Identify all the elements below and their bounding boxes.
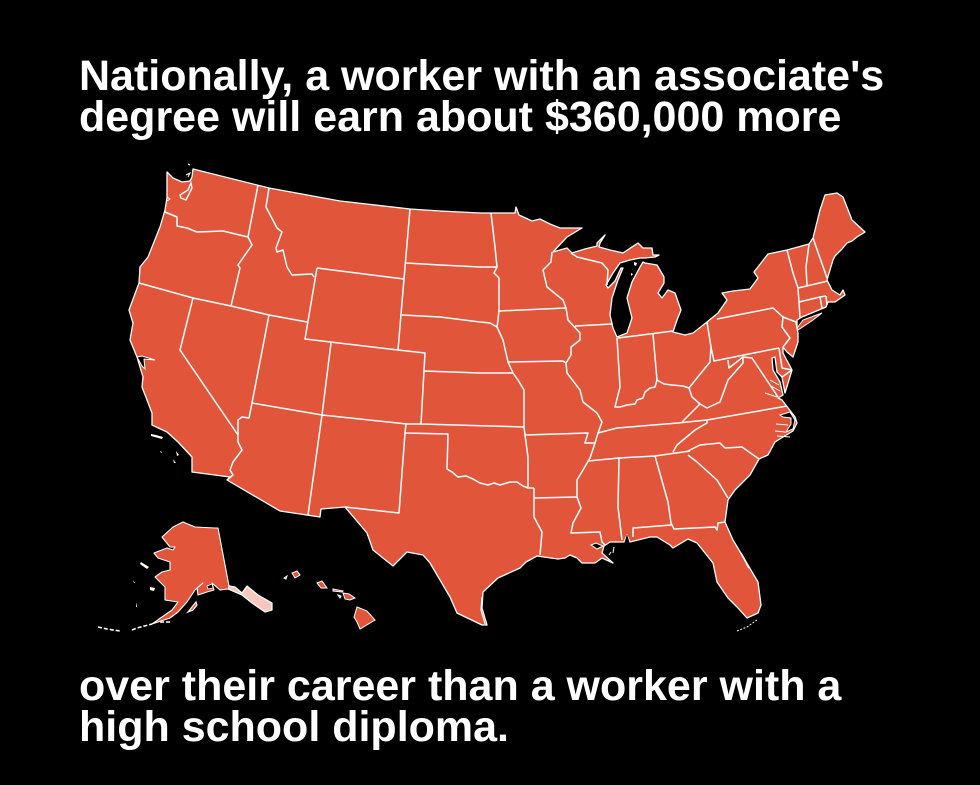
state borders	[139, 185, 828, 555]
North Carolina tidal rivers	[775, 424, 790, 437]
west borders	[139, 185, 534, 515]
Molokai and Lanai	[333, 589, 343, 598]
heading: top statement: Nationally, a worker with an associate's	[79, 52, 884, 100]
Channel Islands	[151, 434, 179, 463]
Maui	[343, 593, 355, 600]
Lake Michigan islands	[631, 262, 637, 276]
central borders	[491, 213, 612, 555]
heading: top statement: degree will earn about $360,000 more	[79, 93, 841, 141]
San Francisco Bay	[137, 356, 155, 369]
Niihau	[284, 576, 287, 579]
Alaska panhandle islands	[228, 586, 272, 612]
Hawaii	[284, 571, 375, 629]
Big Island	[354, 607, 375, 629]
Alaska	[98, 522, 272, 631]
Pamlico Sound	[780, 412, 795, 432]
Long Island	[797, 313, 822, 330]
contiguous states landmass	[129, 169, 865, 625]
Mobile Bay	[625, 535, 629, 542]
Kodiak Island	[188, 602, 197, 612]
east borders	[588, 238, 828, 540]
Chandeleur Islands	[609, 547, 614, 555]
Prince William Sound	[207, 584, 213, 589]
Padre Island	[481, 597, 485, 624]
Bering Sea islands	[133, 562, 155, 607]
Florida Keys	[737, 620, 757, 631]
Alaska mainland	[152, 522, 229, 624]
Chesapeake tidal rivers	[765, 380, 780, 397]
Kauai	[292, 571, 300, 578]
text: bottom statement: high school diploma.	[79, 703, 509, 751]
San Juan Islands	[167, 164, 190, 201]
Aleutian Islands	[98, 622, 172, 631]
heading: top statement	[79, 52, 884, 141]
Puget Sound	[180, 183, 192, 200]
Lake Pontchartrain	[591, 543, 603, 549]
Florida barrier sliver	[741, 553, 749, 568]
text: bottom statement	[79, 662, 842, 751]
text: bottom statement: over their career than a worker with a	[79, 662, 841, 710]
Oahu	[317, 581, 327, 588]
